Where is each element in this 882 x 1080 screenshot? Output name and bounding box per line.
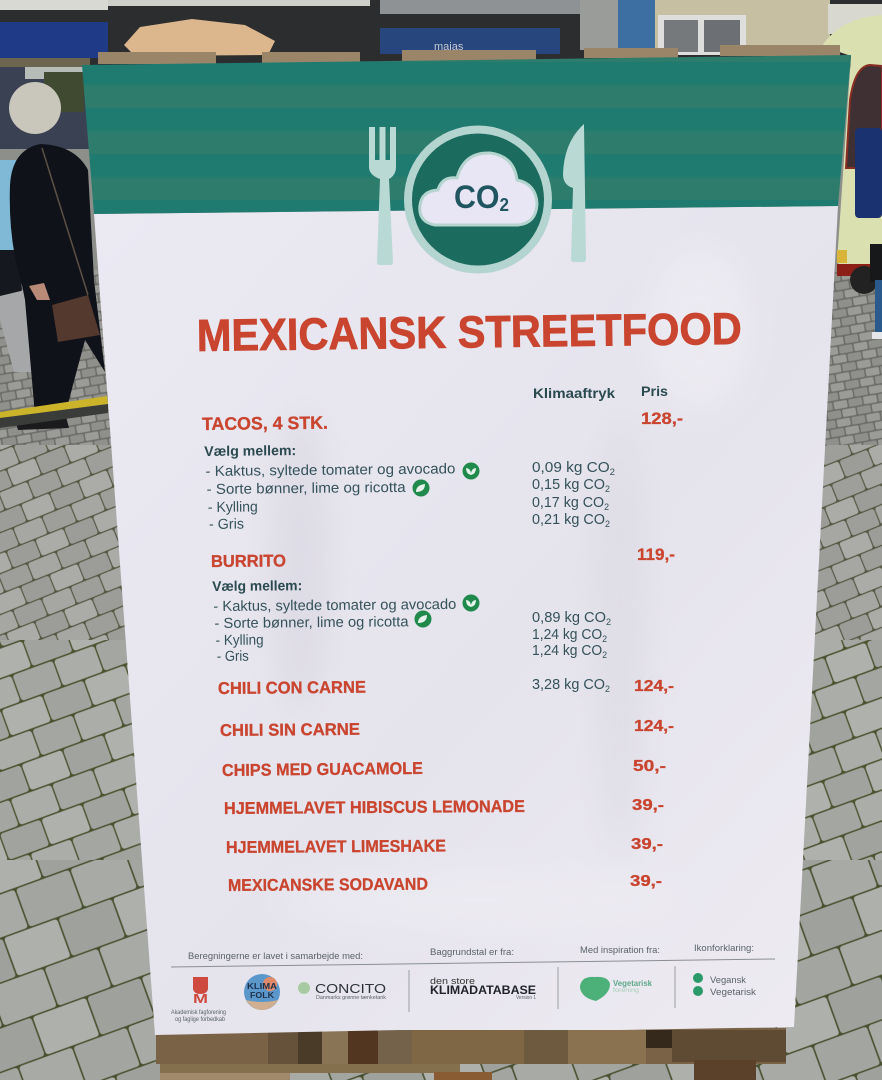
wooden boards above the poster: [98, 45, 840, 64]
background: food van on the right: [822, 15, 882, 339]
burrito climate values: 2: [602, 650, 607, 660]
background: street behind person: [0, 67, 95, 149]
section: burrito: - Sorte bønner, lime og ricotta: [214, 614, 410, 632]
icon: vegan badge burrito: [462, 594, 480, 612]
price: chili con carne: 124,-: [634, 678, 674, 695]
price: chips: 50,-: [633, 758, 666, 775]
logo: Concito: [298, 981, 387, 1001]
burrito climate values: 1,24 kg CO: [532, 643, 605, 659]
column header: climate footprint: Klimaaftryk: [533, 385, 615, 401]
section: burrito: [211, 550, 457, 665]
icon: vegetarian badge burrito: [414, 610, 432, 628]
footer headings: Beregningerne er lavet i samarbejde med:: [188, 951, 363, 962]
menu item: chili con carne: CHILI CON CARNE: [218, 678, 366, 698]
section: burrito: BURRITO: [211, 551, 286, 571]
section: burrito: - Kylling: [216, 633, 264, 649]
logo: Concito: CONCITO: [315, 981, 386, 996]
logo: Vegetarisk Foreningen: Vegetarisk: [613, 978, 652, 988]
burrito climate values: [532, 610, 611, 660]
tacos climate values: 0,17 kg CO: [532, 495, 605, 511]
CO2 label: CO: [454, 179, 502, 215]
tacos climate values: 0,21 kg CO: [532, 512, 605, 528]
legend: icon explanation: Vegansk: [710, 975, 746, 986]
burrito climate values: 0,89 kg CO: [532, 610, 605, 626]
logo: DM: M: [193, 991, 208, 1006]
cloud: [420, 153, 537, 225]
icon: vegetarian badge tacos: [412, 480, 430, 496]
pallet under the poster: [156, 1028, 786, 1080]
menu item: limeshake: HJEMMELAVET LIMESHAKE: [226, 836, 446, 857]
section: tacos: - Sorte bønner, lime og ricotta: [207, 480, 407, 498]
price: limeshake: 39,-: [631, 836, 663, 853]
footer headings: Baggrundstal er fra:: [430, 947, 514, 958]
menu item: hibiscus lemonade: HJEMMELAVET HIBISCUS LEMONADE: [224, 797, 525, 818]
tacos climate values: 2: [605, 484, 610, 494]
logo: DM: [171, 977, 226, 1023]
menu item: sodavand: MEXICANSKE SODAVAND: [228, 875, 428, 895]
section: tacos: - Kylling: [208, 499, 258, 516]
tacos climate values: 0,09 kg CO: [532, 460, 605, 476]
footer headings: Med inspiration fra:: [580, 945, 660, 956]
section: burrito: - Kaktus, syltede tomater og avocado: [213, 597, 456, 615]
poster panel: [94, 206, 838, 1035]
tacos climate values: 2: [605, 519, 610, 529]
climate value: chili con carne: 2: [605, 684, 610, 694]
column header: price: Pris: [641, 383, 668, 399]
burrito climate values: 2: [606, 617, 611, 627]
logo: Klimafolkemødet: FOLK: [250, 991, 274, 1000]
price: burrito: 119,-: [637, 545, 675, 564]
price: chili sin carne: 124,-: [634, 718, 674, 735]
icon: plate with CO2 cloud: [404, 126, 552, 274]
CO2 label: 2: [500, 195, 509, 215]
section: tacos: - Gris: [209, 517, 244, 533]
logo: Vegetarisk Foreningen: [580, 977, 652, 1001]
background: person walking left of the board: [0, 82, 108, 430]
logo: Klimafolkemødet: KLIMA: [247, 982, 277, 991]
icon: knife: [563, 124, 586, 262]
price: tacos: 128,-: [641, 409, 683, 428]
section: tacos: Vælg mellem:: [204, 442, 296, 459]
logo: Den Store Klimadatabase: [430, 976, 536, 1001]
logo: Klimafolkemødet: [244, 974, 280, 1010]
logo: Den Store Klimadatabase: KLIMADATABASE: [430, 985, 536, 997]
climate value: chili con carne: 3,28 kg CO: [532, 677, 605, 693]
logo: Den Store Klimadatabase: den store: [430, 976, 475, 987]
section: burrito: Vælg mellem:: [212, 577, 302, 594]
background: buildings at top: maias: [434, 41, 464, 53]
icon: fork: [369, 127, 396, 265]
title: MEXICANSK STREETFOOD: [196, 303, 742, 361]
icon: vegan badge tacos: [462, 462, 480, 480]
section: tacos: [202, 411, 456, 533]
logo: Vegetarisk Foreningen: forening: [613, 988, 639, 994]
logo: Den Store Klimadatabase: Version 1: [516, 995, 536, 1001]
background: buildings at top: [0, 0, 882, 68]
tacos climate values: [532, 460, 615, 529]
logo: DM: og faglige forbedkab: [175, 1017, 226, 1023]
footer headings: [188, 943, 754, 962]
menu item: chips med guacamole: CHIPS MED GUACAMOLE: [222, 759, 423, 780]
price: sodavand: 39,-: [630, 873, 662, 890]
price: hibiscus lemonade: 39,-: [632, 797, 664, 814]
section: tacos: - Kaktus, syltede tomater og avocado: [205, 461, 456, 480]
menu item: chili sin carne: CHILI SIN CARNE: [220, 720, 360, 740]
tacos climate values: 2: [610, 467, 615, 477]
logo: DM: Akademisk fagforening: [171, 1010, 226, 1016]
legend: icon explanation: [693, 973, 756, 998]
burrito climate values: 1,24 kg CO: [532, 627, 605, 643]
logo: Concito: Danmarks grønne tænketank: [316, 995, 387, 1001]
legend: icon explanation: Vegetarisk: [710, 987, 756, 998]
burrito climate values: 2: [602, 634, 607, 644]
footer headings: Ikonforklaring:: [694, 943, 754, 954]
background: paper bag on the board: [124, 19, 275, 56]
tacos climate values: 2: [604, 502, 609, 512]
section: tacos: TACOS, 4 STK.: [202, 413, 328, 434]
green header band: [82, 55, 851, 214]
section: burrito: - Gris: [217, 649, 249, 665]
tacos climate values: 0,15 kg CO: [532, 477, 605, 493]
